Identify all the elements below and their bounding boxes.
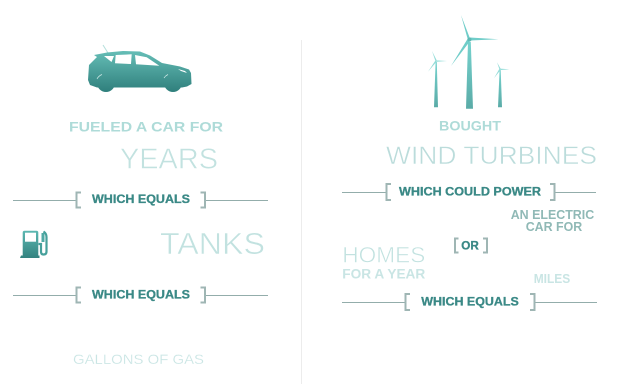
icon: car (88, 45, 192, 92)
icon: fuel pump (20, 231, 46, 258)
divider label: which could power: WHICH COULD POWER (399, 187, 542, 199)
divider label: which equals (13, 288, 268, 302)
stat label: homes: HOMES (342, 242, 425, 267)
divider label: which equals (342, 294, 597, 310)
stat label: tanks: TANKS (160, 226, 265, 261)
panel: wind power (342, 15, 597, 310)
divider label: which equals: WHICH EQUALS (421, 297, 519, 309)
icon: wind turbines (428, 15, 510, 109)
text block: for a year: FOR A YEAR (342, 266, 426, 281)
panel: gasoline car (13, 45, 268, 367)
stat label: years: YEARS (120, 143, 218, 175)
text block: an electric car for: AN ELECTRIC (511, 207, 595, 222)
heading: fueled a car for: FUELED A CAR FOR (69, 118, 223, 134)
stat label: gallons of gas: GALLONS OF GAS (73, 351, 204, 367)
divider label: which equals (13, 192, 268, 208)
divider label: which could power (342, 184, 596, 200)
or connector: OR (461, 241, 480, 253)
text block: an electric car for (511, 207, 595, 234)
text block: an electric car for: CAR FOR (526, 219, 583, 234)
divider label: which equals: WHICH EQUALS (92, 194, 190, 206)
or connector (455, 238, 487, 253)
stat label: wind turbines: WIND TURBINES (386, 142, 597, 170)
stat label: miles: MILES (534, 272, 570, 286)
heading: bought: BOUGHT (439, 118, 501, 134)
divider label: which equals: WHICH EQUALS (92, 290, 190, 302)
